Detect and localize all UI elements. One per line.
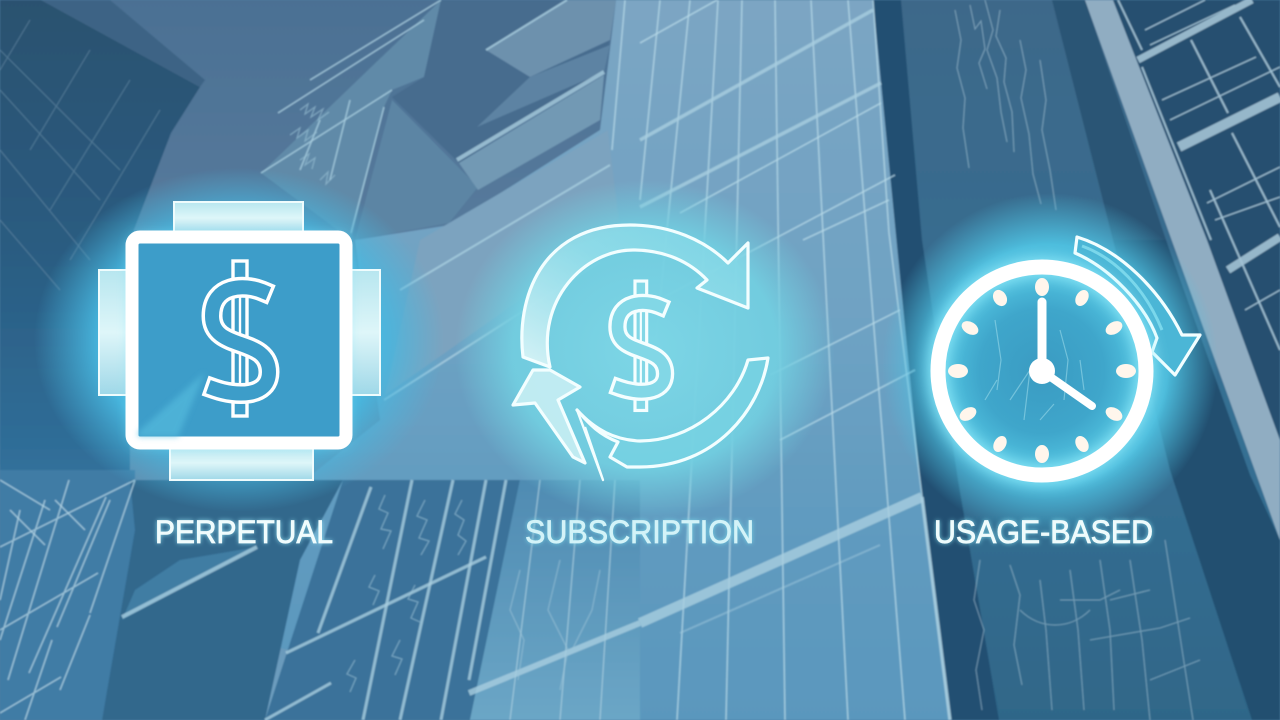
icon: circular arrows with dollar sign: [513, 225, 768, 480]
panel: perpetual licensing: [34, 168, 444, 550]
icon: perpetual licence box with dollar sign: [99, 202, 380, 480]
arrow: upper arc: [522, 225, 748, 367]
panel: usage-based: [882, 193, 1218, 550]
icon: dollar sign: [212, 261, 269, 416]
arrow: lower-left head: [513, 370, 585, 463]
glow: subscription: [455, 180, 835, 520]
icon: arrow around clock: [1075, 237, 1200, 375]
glow: perpetual: [34, 168, 444, 512]
label: perpetual: PERPETUAL: [155, 514, 333, 550]
label: usage-based: USAGE-BASED: [934, 514, 1153, 550]
label: usage-based: USAGE-BASED: [934, 514, 1153, 550]
label: subscription: SUBSCRIPTION: [525, 514, 754, 550]
label: subscription: SUBSCRIPTION: [525, 514, 754, 550]
label: perpetual: PERPETUAL: [155, 514, 333, 550]
icon: dollar sign: [617, 281, 665, 410]
arrow: lower arc: [577, 358, 768, 467]
glow: usage-based: [882, 193, 1218, 537]
icon: clock: [938, 267, 1146, 475]
panel: subscription: [455, 180, 835, 550]
